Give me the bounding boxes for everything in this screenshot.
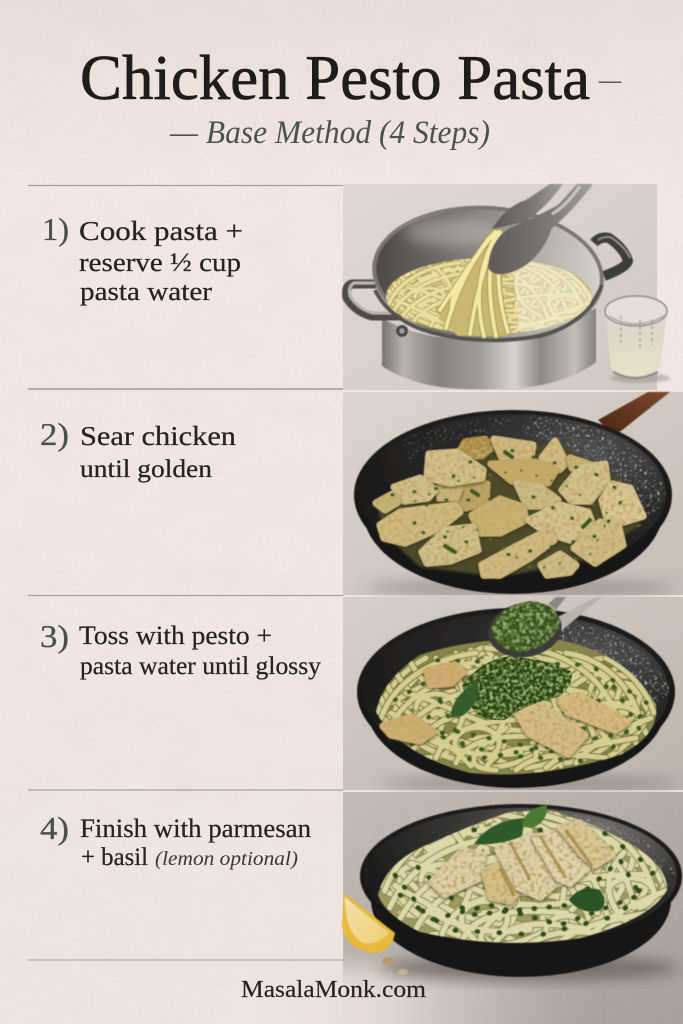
icon: pot (347, 198, 630, 389)
step 4 text (80, 814, 311, 871)
step 2 text (80, 421, 237, 483)
step 4 number: 4) (40, 810, 69, 846)
pasta with parmesan (378, 810, 668, 944)
pasta with pesto (375, 640, 657, 776)
panel: step 1 photo (343, 184, 670, 390)
pesto mound (462, 656, 572, 720)
icon: frying pan (354, 392, 675, 596)
footer floor fade (230, 968, 590, 1024)
chicken strips (383, 665, 627, 754)
step 3 number: 3) (40, 618, 69, 654)
icon: lemon wedge (342, 893, 395, 953)
sliced chicken (432, 823, 612, 901)
step 1 text: pasta water (80, 277, 212, 306)
icon: tongs (488, 184, 593, 274)
step 1 text: Cook pasta + (79, 216, 243, 246)
footer: website: MasalaMonk.com (241, 977, 426, 1003)
panel: step 2 photo (343, 392, 683, 596)
step 1 number: 1) (42, 211, 69, 247)
photo backdrop (343, 597, 683, 790)
subtitle: — Base Method (4 Steps) (169, 115, 490, 151)
title: – (598, 63, 622, 96)
photo backdrop (343, 792, 683, 1024)
photo backdrop (343, 184, 657, 390)
icon: dark bowl pan (357, 608, 680, 790)
step 2 (40, 416, 237, 483)
basil leaves (474, 805, 605, 912)
sear marks (500, 830, 592, 896)
step 2 text: until golden (80, 456, 213, 483)
herb flecks on chicken (392, 450, 625, 570)
crumbs (382, 958, 408, 976)
chicken pieces (376, 439, 643, 577)
step 3 text: pasta water until glossy (80, 653, 321, 680)
panel: step 4 photo (341, 792, 683, 1024)
step 4 (40, 810, 311, 871)
step 1 text (79, 216, 243, 306)
icon: dark serving bowl (360, 804, 682, 981)
step 3 (40, 618, 321, 680)
step 2 number: 2) (40, 416, 69, 452)
title: Chicken Pesto Pasta (80, 42, 590, 113)
pasta in pot (386, 256, 594, 335)
panel: step 3 photo (343, 597, 683, 790)
lifted pasta bundle (438, 232, 508, 336)
icon: spoon with pesto (484, 597, 602, 663)
step 2 text: Sear chicken (80, 421, 237, 451)
step 3 text (79, 621, 321, 680)
step 1 (42, 211, 243, 306)
icon: glass of pasta water (605, 296, 670, 383)
step 4 text: Finish with parmesan (80, 814, 311, 843)
step 4 text: (lemon optional) (155, 848, 298, 870)
photo backdrop (343, 392, 683, 595)
step 3 text: Toss with pesto + (79, 621, 272, 650)
step 4 text: + basil (81, 844, 148, 871)
step 1 text: reserve ½ cup (79, 248, 241, 277)
icon: basil leaf (450, 681, 478, 718)
divider rules (28, 186, 343, 960)
